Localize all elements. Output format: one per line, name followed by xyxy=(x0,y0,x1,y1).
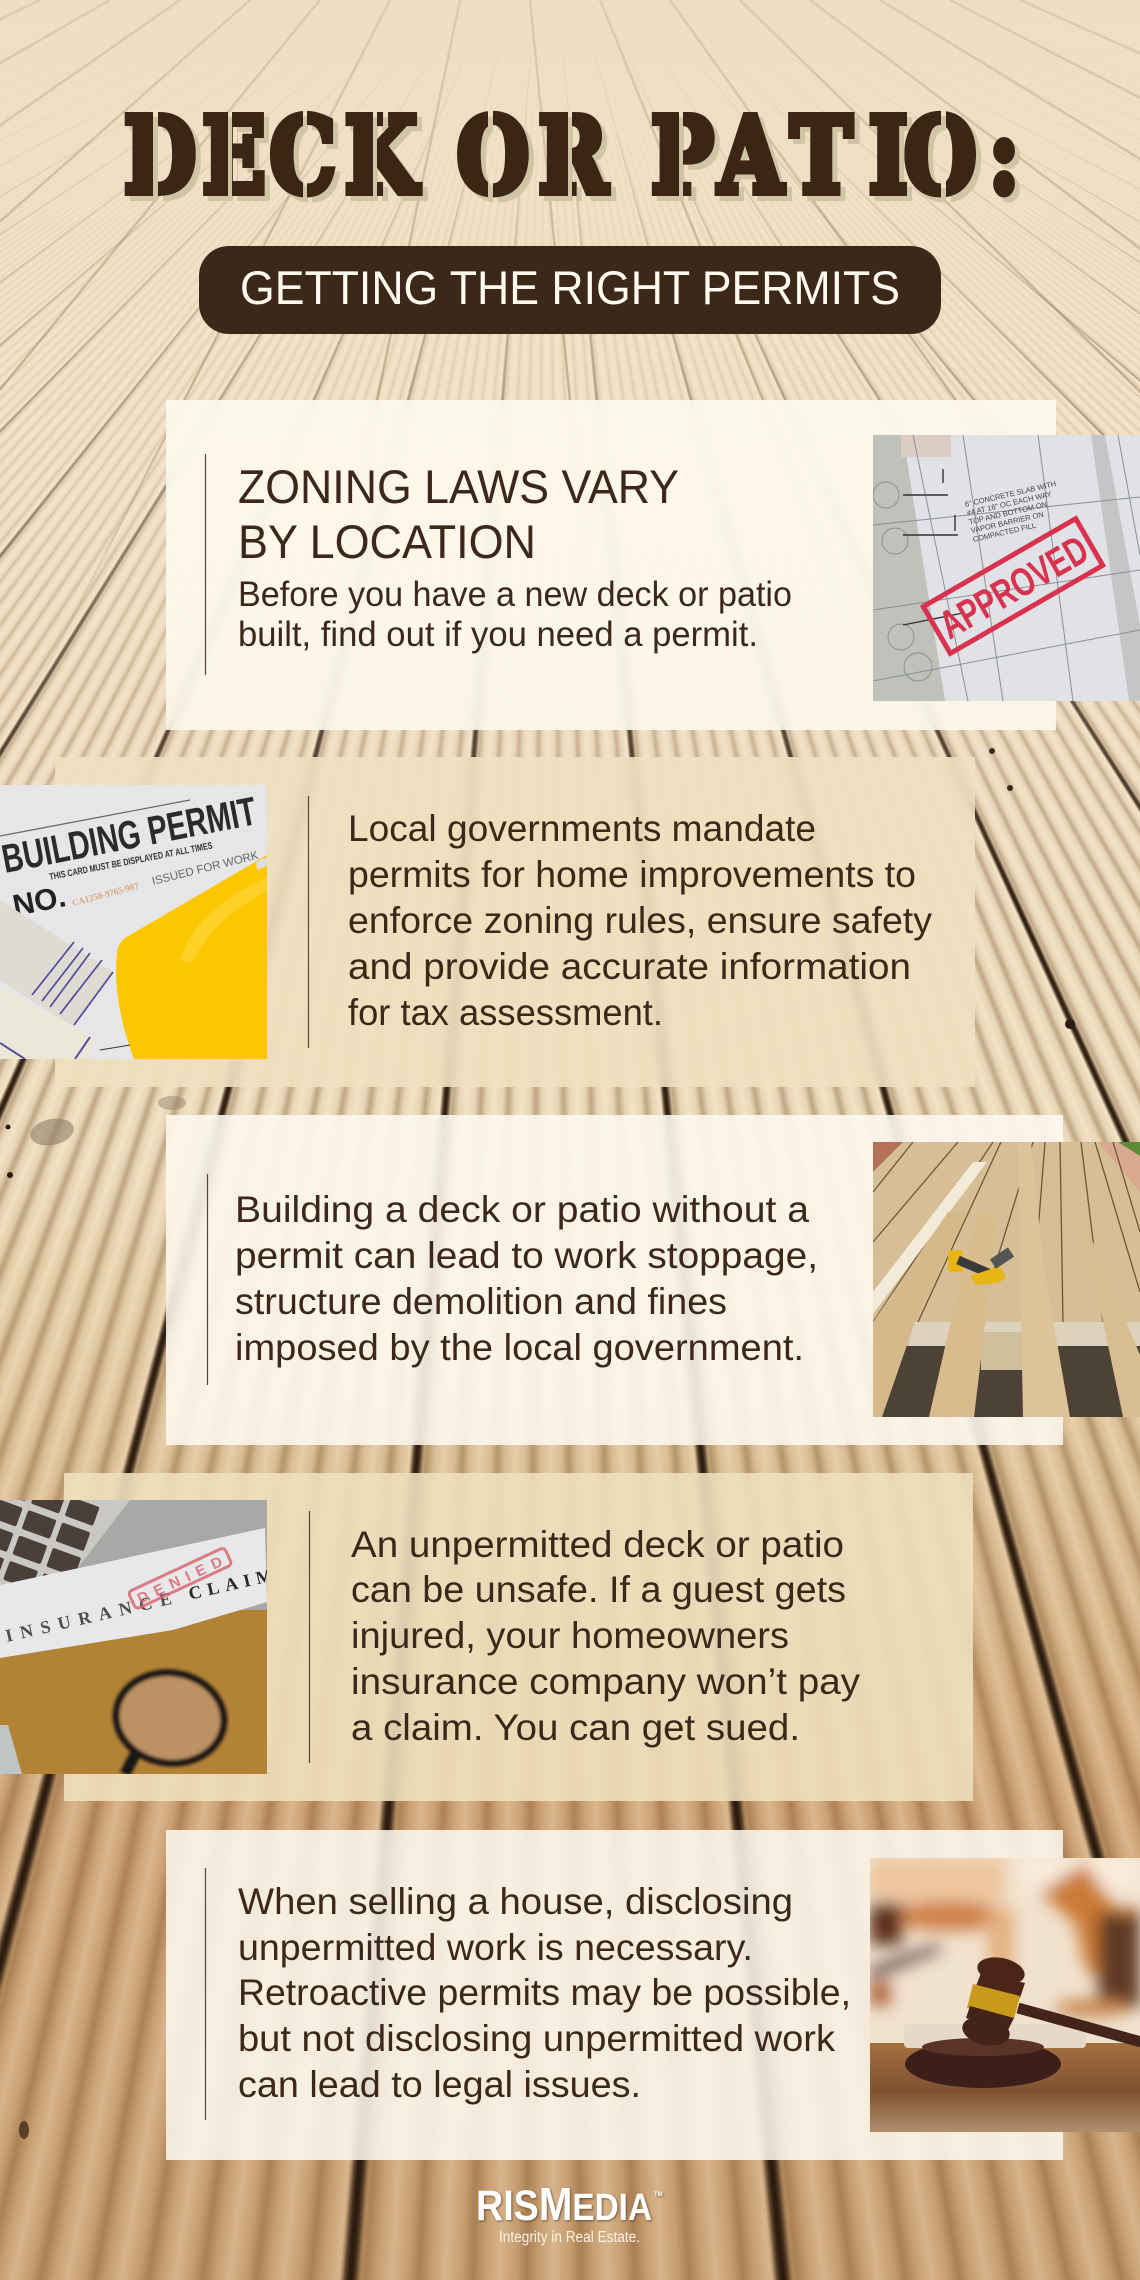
body text: and provide accurate information xyxy=(348,946,911,987)
heading: zoning laws vary by location xyxy=(238,460,679,568)
background: pale wash over the distant boards xyxy=(0,0,1140,900)
panel: local governments mandate permits xyxy=(0,757,975,1087)
photo: denied insurance claim and magnifier: INSURANCE xyxy=(3,1588,174,1646)
body text: can be unsafe. If a guest gets xyxy=(351,1569,846,1610)
photo: building permit and hard hat: ISSUED FOR WORK xyxy=(151,850,260,888)
photo: approved blueprint stamp xyxy=(873,435,1140,701)
body text: Building a deck or patio without a xyxy=(235,1189,809,1230)
panel: unpermitted deck can be unsafe xyxy=(0,1473,973,1801)
body text xyxy=(238,1881,851,2105)
photo: denied insurance claim and magnifier: DENIED xyxy=(135,1553,225,1608)
panel: disclosing unpermitted work xyxy=(166,1830,1140,2160)
body text: Before you have a new deck or patio xyxy=(238,575,792,614)
heading: zoning laws vary by location: BY LOCATION xyxy=(238,515,536,568)
body text: built, find out if you need a permit. xyxy=(238,615,758,654)
body text: Local governments mandate xyxy=(348,808,816,849)
body text: permit can lead to work stoppage, xyxy=(235,1235,818,1276)
panel: building without a permit xyxy=(166,1115,1140,1445)
body text: a claim. You can get sued. xyxy=(351,1707,800,1748)
gavel head xyxy=(975,1953,1027,1989)
body text: enforce zoning rules, ensure safety xyxy=(348,900,933,941)
hard hat xyxy=(116,855,267,1059)
photo: denied insurance claim and magnifier xyxy=(0,1500,275,1774)
photo: denied insurance claim and magnifier: CLAIM xyxy=(187,1565,275,1604)
body text xyxy=(238,575,792,654)
panel: zoning laws vary xyxy=(166,400,1140,730)
body text: but not disclosing unpermitted work xyxy=(238,2018,836,2059)
heading: zoning laws vary by location: ZONING LAWS VARY xyxy=(238,460,679,513)
photo: building permit and hard hat xyxy=(0,785,267,1059)
body text: insurance company won’t pay xyxy=(351,1661,861,1702)
body text: for tax assessment. xyxy=(348,992,663,1033)
photo: building permit and hard hat: THIS CARD MUST BE DISPLAYED AT ALL TIMES xyxy=(48,840,214,883)
logo: RISMedia: TM xyxy=(654,2192,663,2198)
photo: deck under construction with drill xyxy=(873,1142,1140,1417)
body text: unpermitted work is necessary. xyxy=(238,1927,753,1968)
gavel handle xyxy=(1018,2008,1140,2042)
photo: judge gavel on a table xyxy=(870,1858,1140,2132)
background: far plank seams xyxy=(0,0,1140,650)
photo: approved blueprint stamp: #4 AT 16" OC EACH WAY xyxy=(966,489,1052,518)
photo: approved blueprint stamp: COMPACTED FILL xyxy=(972,521,1037,544)
photo: approved blueprint stamp: VAPOR BARRIER ON xyxy=(970,510,1045,535)
photo: building permit and hard hat: NO. xyxy=(10,880,69,923)
body text: imposed by the local government. xyxy=(235,1327,804,1368)
title: DECK OR PATIO: xyxy=(124,96,1020,217)
body text: structure demolition and fines xyxy=(235,1281,727,1322)
rolled plans xyxy=(0,900,113,1027)
body text: can lead to legal issues. xyxy=(238,2064,641,2105)
drill xyxy=(948,1250,1011,1285)
laptop keys xyxy=(0,1500,100,1582)
body text: An unpermitted deck or patio xyxy=(351,1524,844,1565)
subtitle pill xyxy=(199,246,941,334)
gavel block xyxy=(905,2040,1061,2088)
body text: injured, your homeowners xyxy=(351,1615,789,1656)
body text: When selling a house, disclosing xyxy=(238,1881,793,1922)
body text: Retroactive permits may be possible, xyxy=(238,1972,851,2013)
subtitle text: GETTING THE RIGHT PERMITS xyxy=(240,261,900,314)
body text xyxy=(235,1189,818,1368)
photo: approved blueprint stamp: TOP AND BOTTOM ON xyxy=(968,500,1048,526)
photo: approved blueprint stamp: 6" CONCRETE SLAB WITH xyxy=(964,479,1057,509)
body text xyxy=(348,808,933,1033)
body text: permits for home improvements to xyxy=(348,854,916,895)
logo tagline: Integrity in Real Estate. xyxy=(499,2229,640,2246)
body text xyxy=(351,1524,861,1748)
photo: building permit and hard hat: CA1258-9765-987 xyxy=(71,880,140,908)
magnifier xyxy=(110,1666,230,1774)
